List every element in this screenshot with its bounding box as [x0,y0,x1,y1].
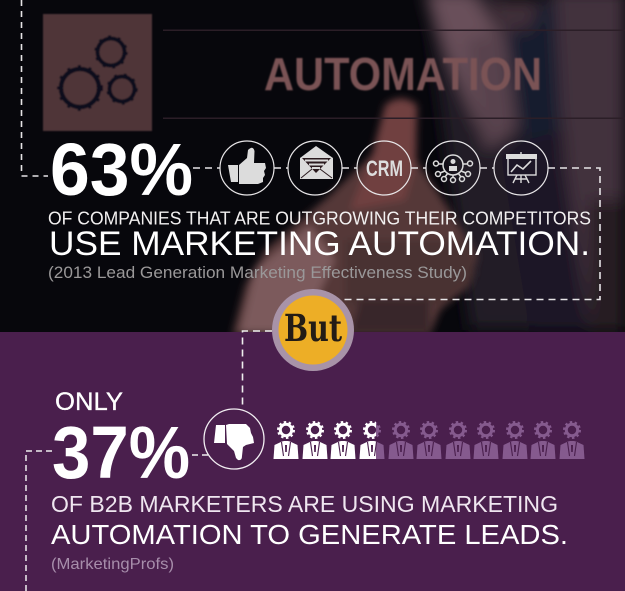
dashed connector lower [242,331,272,405]
text: use marketing automation: USE MARKETING AUTOMATION. [49,225,590,263]
icon row [220,141,548,195]
dashed connectors for 37% [26,451,209,591]
dashed connectors top [22,0,600,300]
highlighted people [274,422,384,459]
stat: 37%: 37% [52,411,190,494]
badge: But: But [284,306,342,350]
icon: thumbs up [220,141,274,195]
people pictogram [274,422,584,459]
icon: CRM [357,141,411,195]
text: b2b line: OF B2B MARKETERS ARE USING MARKETING [51,491,558,517]
blurred suit [425,0,625,332]
badge: But [272,289,354,371]
blurred hand [232,98,478,335]
faded people [360,422,584,459]
text: source study: (2013 Lead Generation Marketing Effectiveness Study) [48,264,467,282]
text: source: (MarketingProfs) [51,556,174,573]
text: companies line: OF COMPANIES THAT ARE OUTGROWING THEIR COMPETITORS [48,208,591,228]
text: generate leads: AUTOMATION TO GENERATE LEADS. [51,519,568,550]
icon: thumbs down [204,409,264,469]
icon: presentation chart [494,141,548,195]
purple panel [0,332,625,591]
photo background [0,0,625,335]
screen word: AUTOMATION [264,48,542,100]
icon: CRM: CRM [366,156,403,181]
icon: envelope [288,141,342,195]
stat: 63%: 63% [50,128,193,211]
text: only: ONLY [55,388,123,416]
icon: gears on screen [43,14,152,131]
icon: network [426,141,480,195]
automation screen panel [43,14,625,131]
